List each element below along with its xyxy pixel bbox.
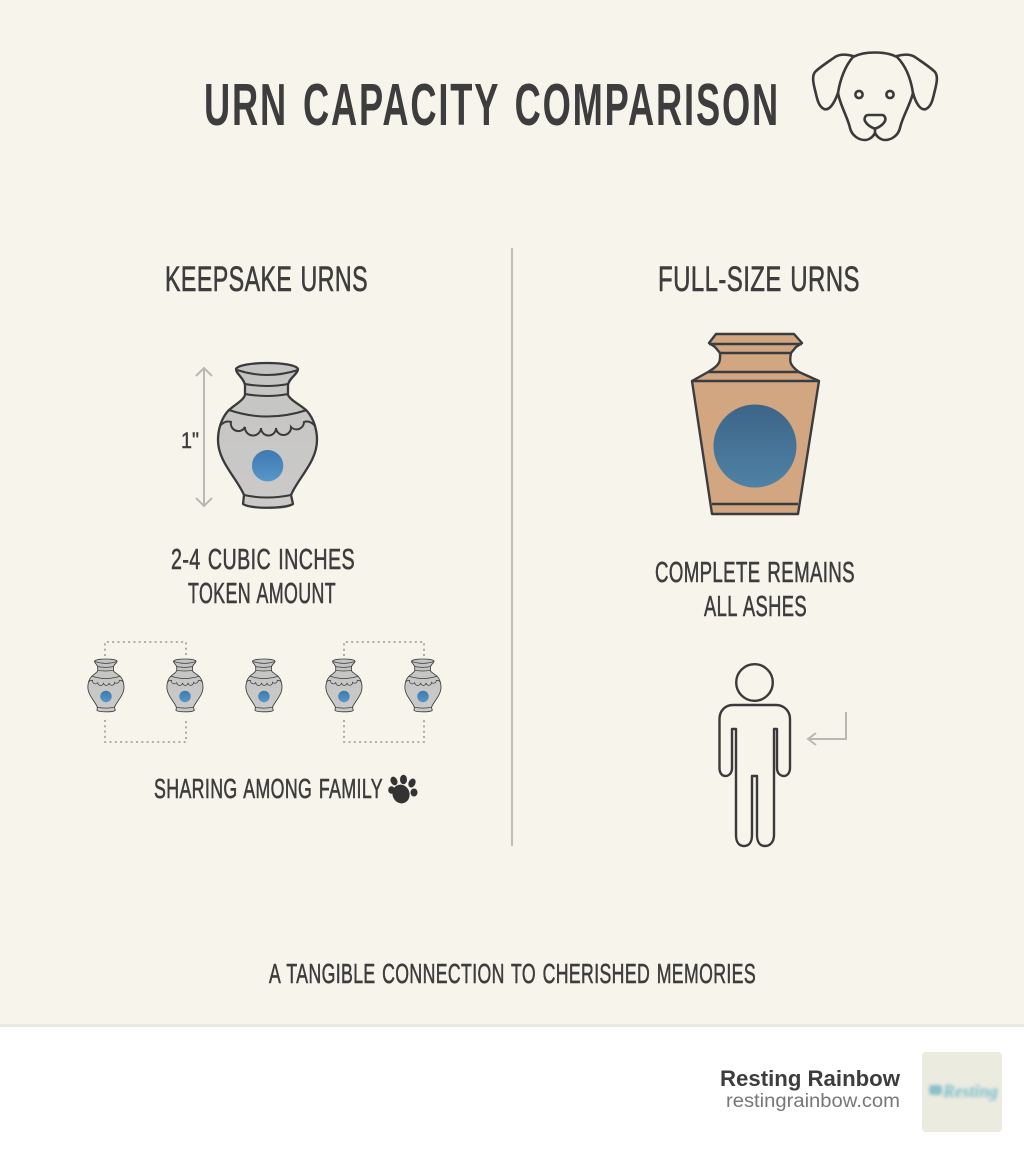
- text: closing line: A TANGIBLE CONNECTION TO CHERISHED MEMORIES: [269, 958, 756, 989]
- icon: person: [720, 664, 790, 846]
- icon: keepsake vase: [218, 363, 317, 508]
- icon: full-size urn: [692, 334, 819, 514]
- footer brand: [720, 1052, 1002, 1132]
- icon: paw: [388, 775, 418, 806]
- small urn row: [88, 659, 441, 712]
- arrow: pointing to person: [808, 712, 846, 745]
- heading: full-size urns: FULL-SIZE URNS: [658, 260, 860, 299]
- icon: height arrow: [196, 368, 212, 506]
- panel: full-size urns: [655, 260, 860, 846]
- dotted bracket left: [105, 642, 186, 742]
- dotted bracket right: [344, 642, 424, 742]
- label: one inch: 1": [181, 428, 199, 453]
- logo: [922, 1052, 1002, 1132]
- brand name: Resting Rainbow: [720, 1066, 900, 1091]
- brand url: restingrainbow.com: [726, 1091, 900, 1112]
- text: token amount: TOKEN AMOUNT: [188, 578, 336, 610]
- text: complete remains: COMPLETE REMAINS: [655, 557, 855, 589]
- logo: Resting: [942, 1081, 998, 1101]
- text: sharing among family: SHARING AMONG FAMILY: [154, 773, 383, 804]
- icon: dog head: [813, 52, 937, 140]
- panel: keepsake urns: [88, 260, 441, 806]
- text: capacity: 2-4 CUBIC INCHES: [171, 544, 355, 576]
- text: all ashes: ALL ASHES: [704, 591, 807, 623]
- heading: keepsake urns: KEEPSAKE URNS: [165, 260, 368, 299]
- divider: [511, 248, 513, 846]
